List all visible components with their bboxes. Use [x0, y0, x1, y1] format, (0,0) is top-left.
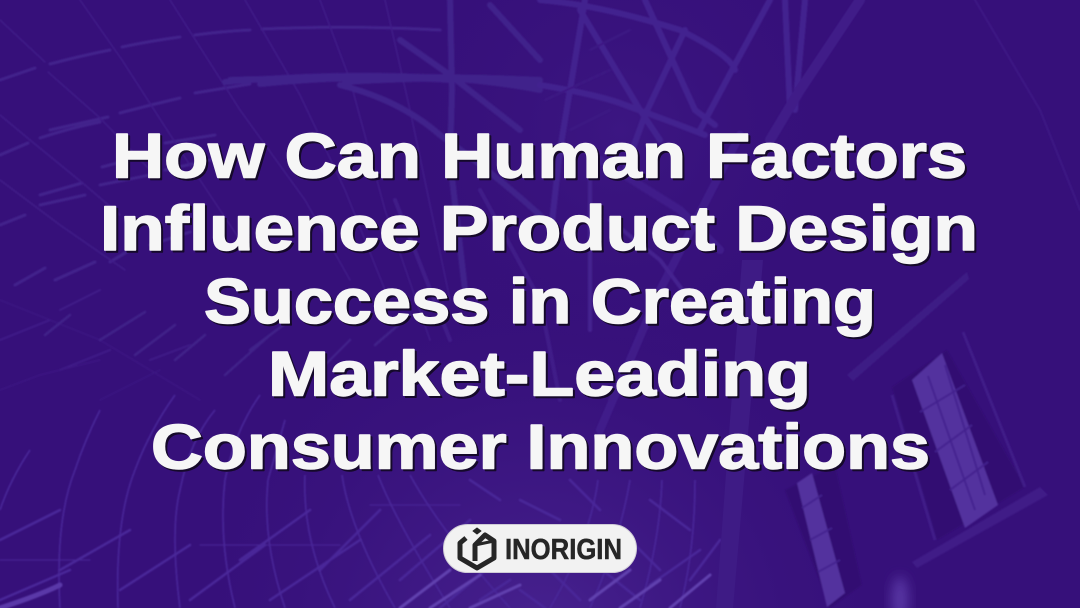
- background: roof lattice, top: [0, 0, 1080, 340]
- lower window bars: [802, 495, 840, 572]
- background: concentric roof arcs, lower left and centre: [0, 395, 695, 608]
- main title: [100, 122, 978, 482]
- background: arched window, lower: [785, 465, 862, 608]
- background: arched window, right: [847, 272, 1048, 568]
- title line 2: Influence Product Design: [100, 194, 978, 264]
- background: roof lattice, centre: [0, 135, 740, 430]
- window bars: [920, 365, 988, 510]
- cornice: [847, 272, 969, 381]
- background: vertical pillar: [716, 260, 763, 608]
- logo badge: [444, 524, 636, 572]
- title line 1: How Can Human Factors: [112, 122, 967, 192]
- lower window frame: [785, 465, 862, 608]
- badge pill: [444, 524, 636, 572]
- window glass: [912, 353, 998, 528]
- title line 4: Market-Leading: [268, 340, 811, 410]
- wordmark: INORIGIN: [505, 534, 622, 566]
- title line 3: Success in Creating: [204, 267, 876, 337]
- window frame: [892, 350, 1025, 540]
- title line 5: Consumer Innovations: [151, 412, 930, 482]
- window column: [892, 332, 1025, 540]
- window sill: [912, 487, 1048, 568]
- glow patch: [892, 576, 908, 608]
- background: diagonal roof ribs, lower band: [0, 312, 720, 608]
- lower window glass: [797, 473, 845, 607]
- icon: inorigin cube: [460, 528, 494, 568]
